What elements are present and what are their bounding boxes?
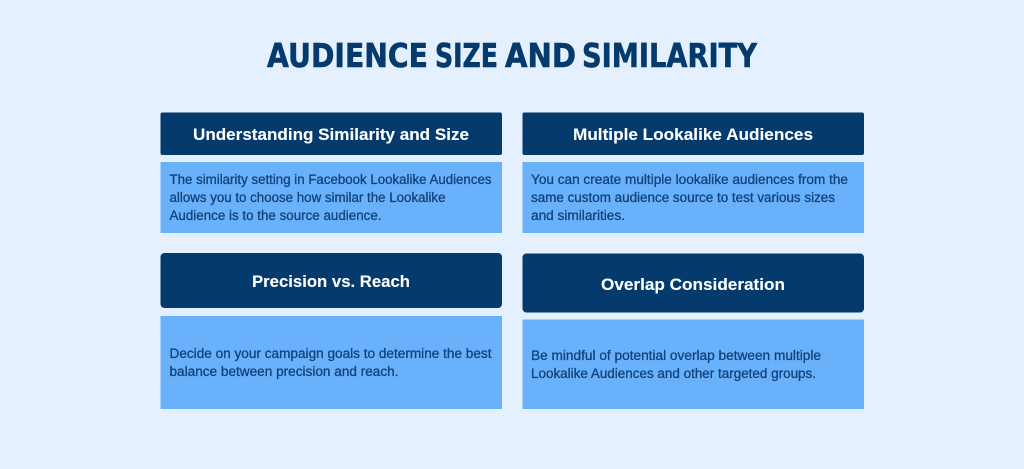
- body: overlap consideration: Be mindful of potential overlap between multiple: [531, 348, 821, 363]
- header: multiple lookalike audiences: [522, 112, 864, 155]
- header: understanding similarity and size: [160, 112, 502, 155]
- panel: understanding similarity and size: [160, 112, 502, 233]
- body: multiple lookalike audiences: [522, 162, 864, 233]
- body: overlap consideration: [522, 320, 864, 409]
- title: SIZE: [435, 37, 498, 75]
- panel: precision vs. reach: [160, 253, 502, 409]
- title: AUDIENCE: [267, 37, 428, 75]
- title: SIMILARITY: [582, 37, 757, 75]
- header: overlap consideration: [522, 254, 864, 312]
- body: understanding similarity and size: allows you to choose how similar the Lookalike: [170, 190, 446, 205]
- header: precision vs. reach: Precision vs. Reach: [252, 272, 410, 291]
- header: understanding similarity and size: Understanding Similarity and Size: [193, 125, 469, 144]
- body: multiple lookalike audiences: and similarities.: [531, 208, 625, 223]
- body: precision vs. reach: balance between precision and reach.: [170, 364, 398, 379]
- body: multiple lookalike audiences: same custom audience source to test various sizes: [531, 190, 835, 205]
- header: multiple lookalike audiences: Multiple Lookalike Audiences: [573, 125, 813, 144]
- panel: multiple lookalike audiences: [522, 112, 864, 233]
- body: precision vs. reach: [160, 316, 502, 409]
- body: precision vs. reach: Decide on your campaign goals to determine the best: [170, 346, 492, 361]
- panel: overlap consideration: [522, 254, 864, 409]
- header: overlap consideration: Overlap Consideration: [601, 275, 785, 294]
- title: [267, 37, 757, 75]
- header: precision vs. reach: [160, 253, 502, 308]
- body: understanding similarity and size: Audience is to the source audience.: [170, 208, 382, 223]
- body: understanding similarity and size: [160, 162, 502, 233]
- body: multiple lookalike audiences: You can create multiple lookalike audiences from the: [531, 172, 848, 187]
- title: AND: [505, 37, 576, 75]
- body: overlap consideration: Lookalike Audiences and other targeted groups.: [531, 366, 816, 381]
- body: understanding similarity and size: The similarity setting in Facebook Lookalike Audiences: [170, 172, 492, 187]
